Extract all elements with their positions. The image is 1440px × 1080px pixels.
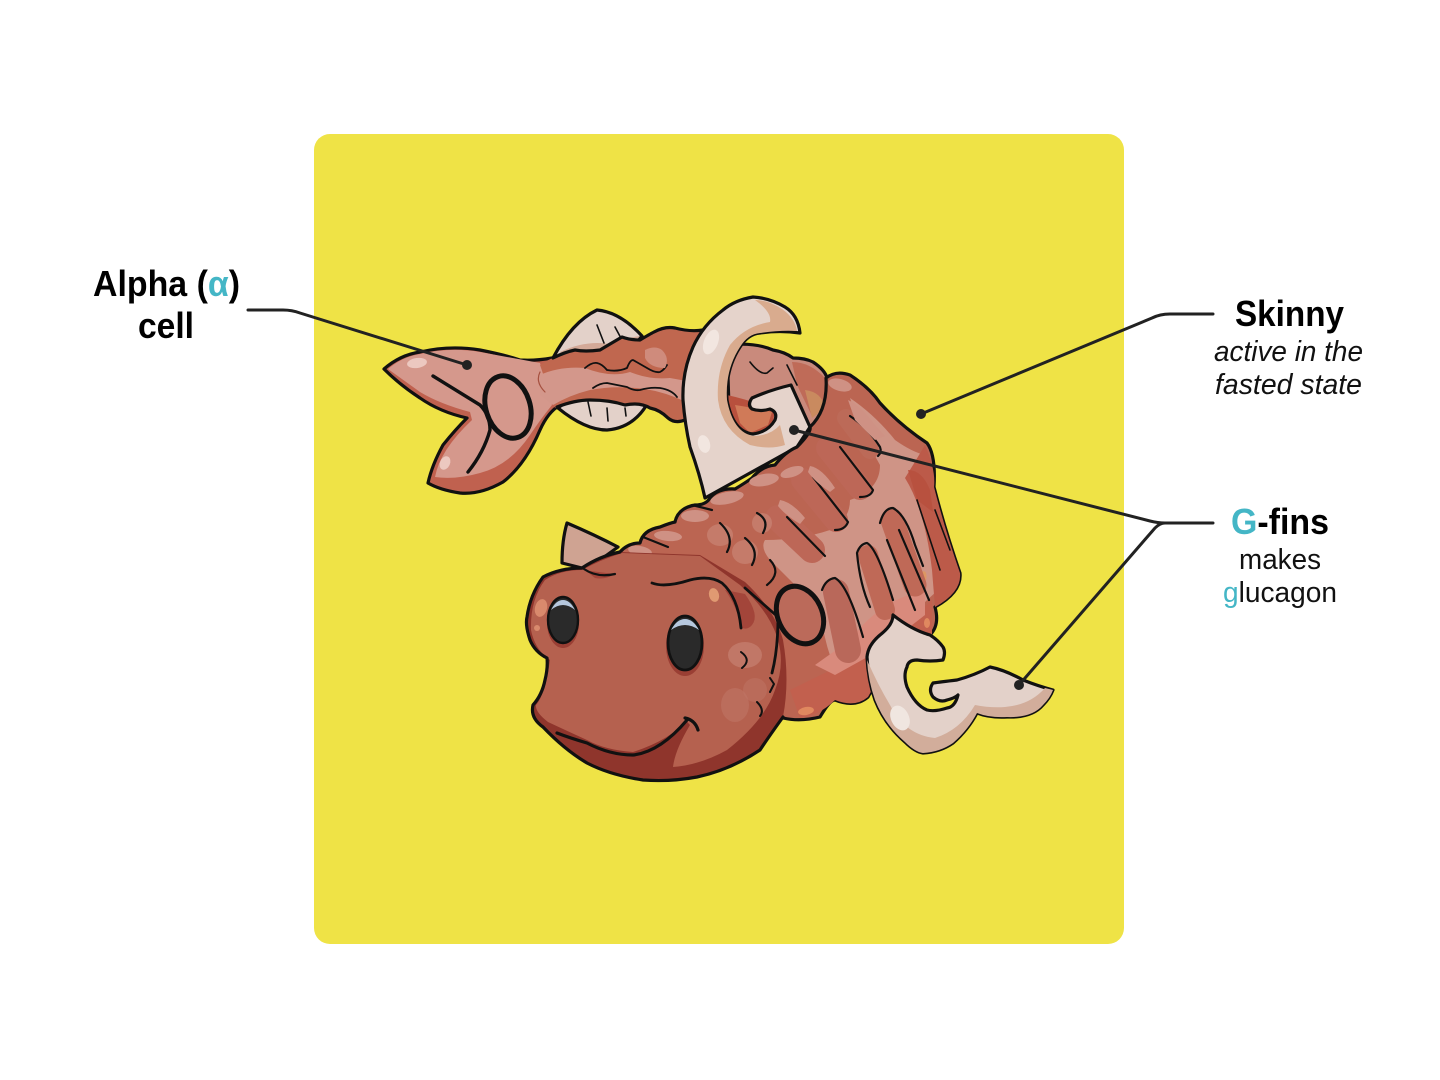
callout: G-fins leaders [789, 425, 1213, 690]
light mesh between ribs [763, 398, 938, 680]
ribs [778, 416, 950, 650]
back bumps [627, 376, 885, 558]
callout: alpha cell leader [248, 310, 472, 370]
rear body through the G loop [727, 344, 827, 450]
label: G-fins [1223, 501, 1337, 609]
callout: skinny leader [916, 314, 1213, 419]
tail fin markings [433, 370, 539, 472]
main body [600, 373, 960, 720]
mouth [557, 718, 698, 755]
label: Alpha cell: Alpha (α) [93, 263, 240, 304]
belly fin [558, 395, 646, 430]
label: Alpha cell: cell [138, 305, 194, 346]
label: Alpha cell [93, 263, 240, 346]
label: Skinny: fasted state [1215, 369, 1362, 401]
tail body segment [538, 328, 703, 422]
tail fin [384, 348, 560, 493]
eye: right [666, 616, 704, 676]
dorsal fin [553, 310, 642, 372]
label: G-fins: makes [1239, 544, 1321, 576]
side fin ring [767, 579, 833, 651]
G-fin: tail [867, 615, 1053, 753]
label: G-fins: glucagon [1223, 577, 1337, 609]
label: G-fins: G-fins [1231, 501, 1329, 542]
brow and cheek lines [584, 569, 778, 716]
flank shadow [905, 445, 960, 607]
G-fin: top [683, 297, 810, 498]
illustration: alpha cell fish [384, 297, 1053, 781]
panel: yellow background [314, 134, 1124, 944]
eye: left [547, 597, 579, 648]
label: Skinny: active in the [1214, 336, 1363, 368]
head [526, 552, 786, 781]
horn [562, 523, 618, 568]
label: Skinny [1214, 293, 1363, 401]
label: Skinny: Skinny [1235, 293, 1344, 334]
mottled scales [686, 513, 772, 572]
